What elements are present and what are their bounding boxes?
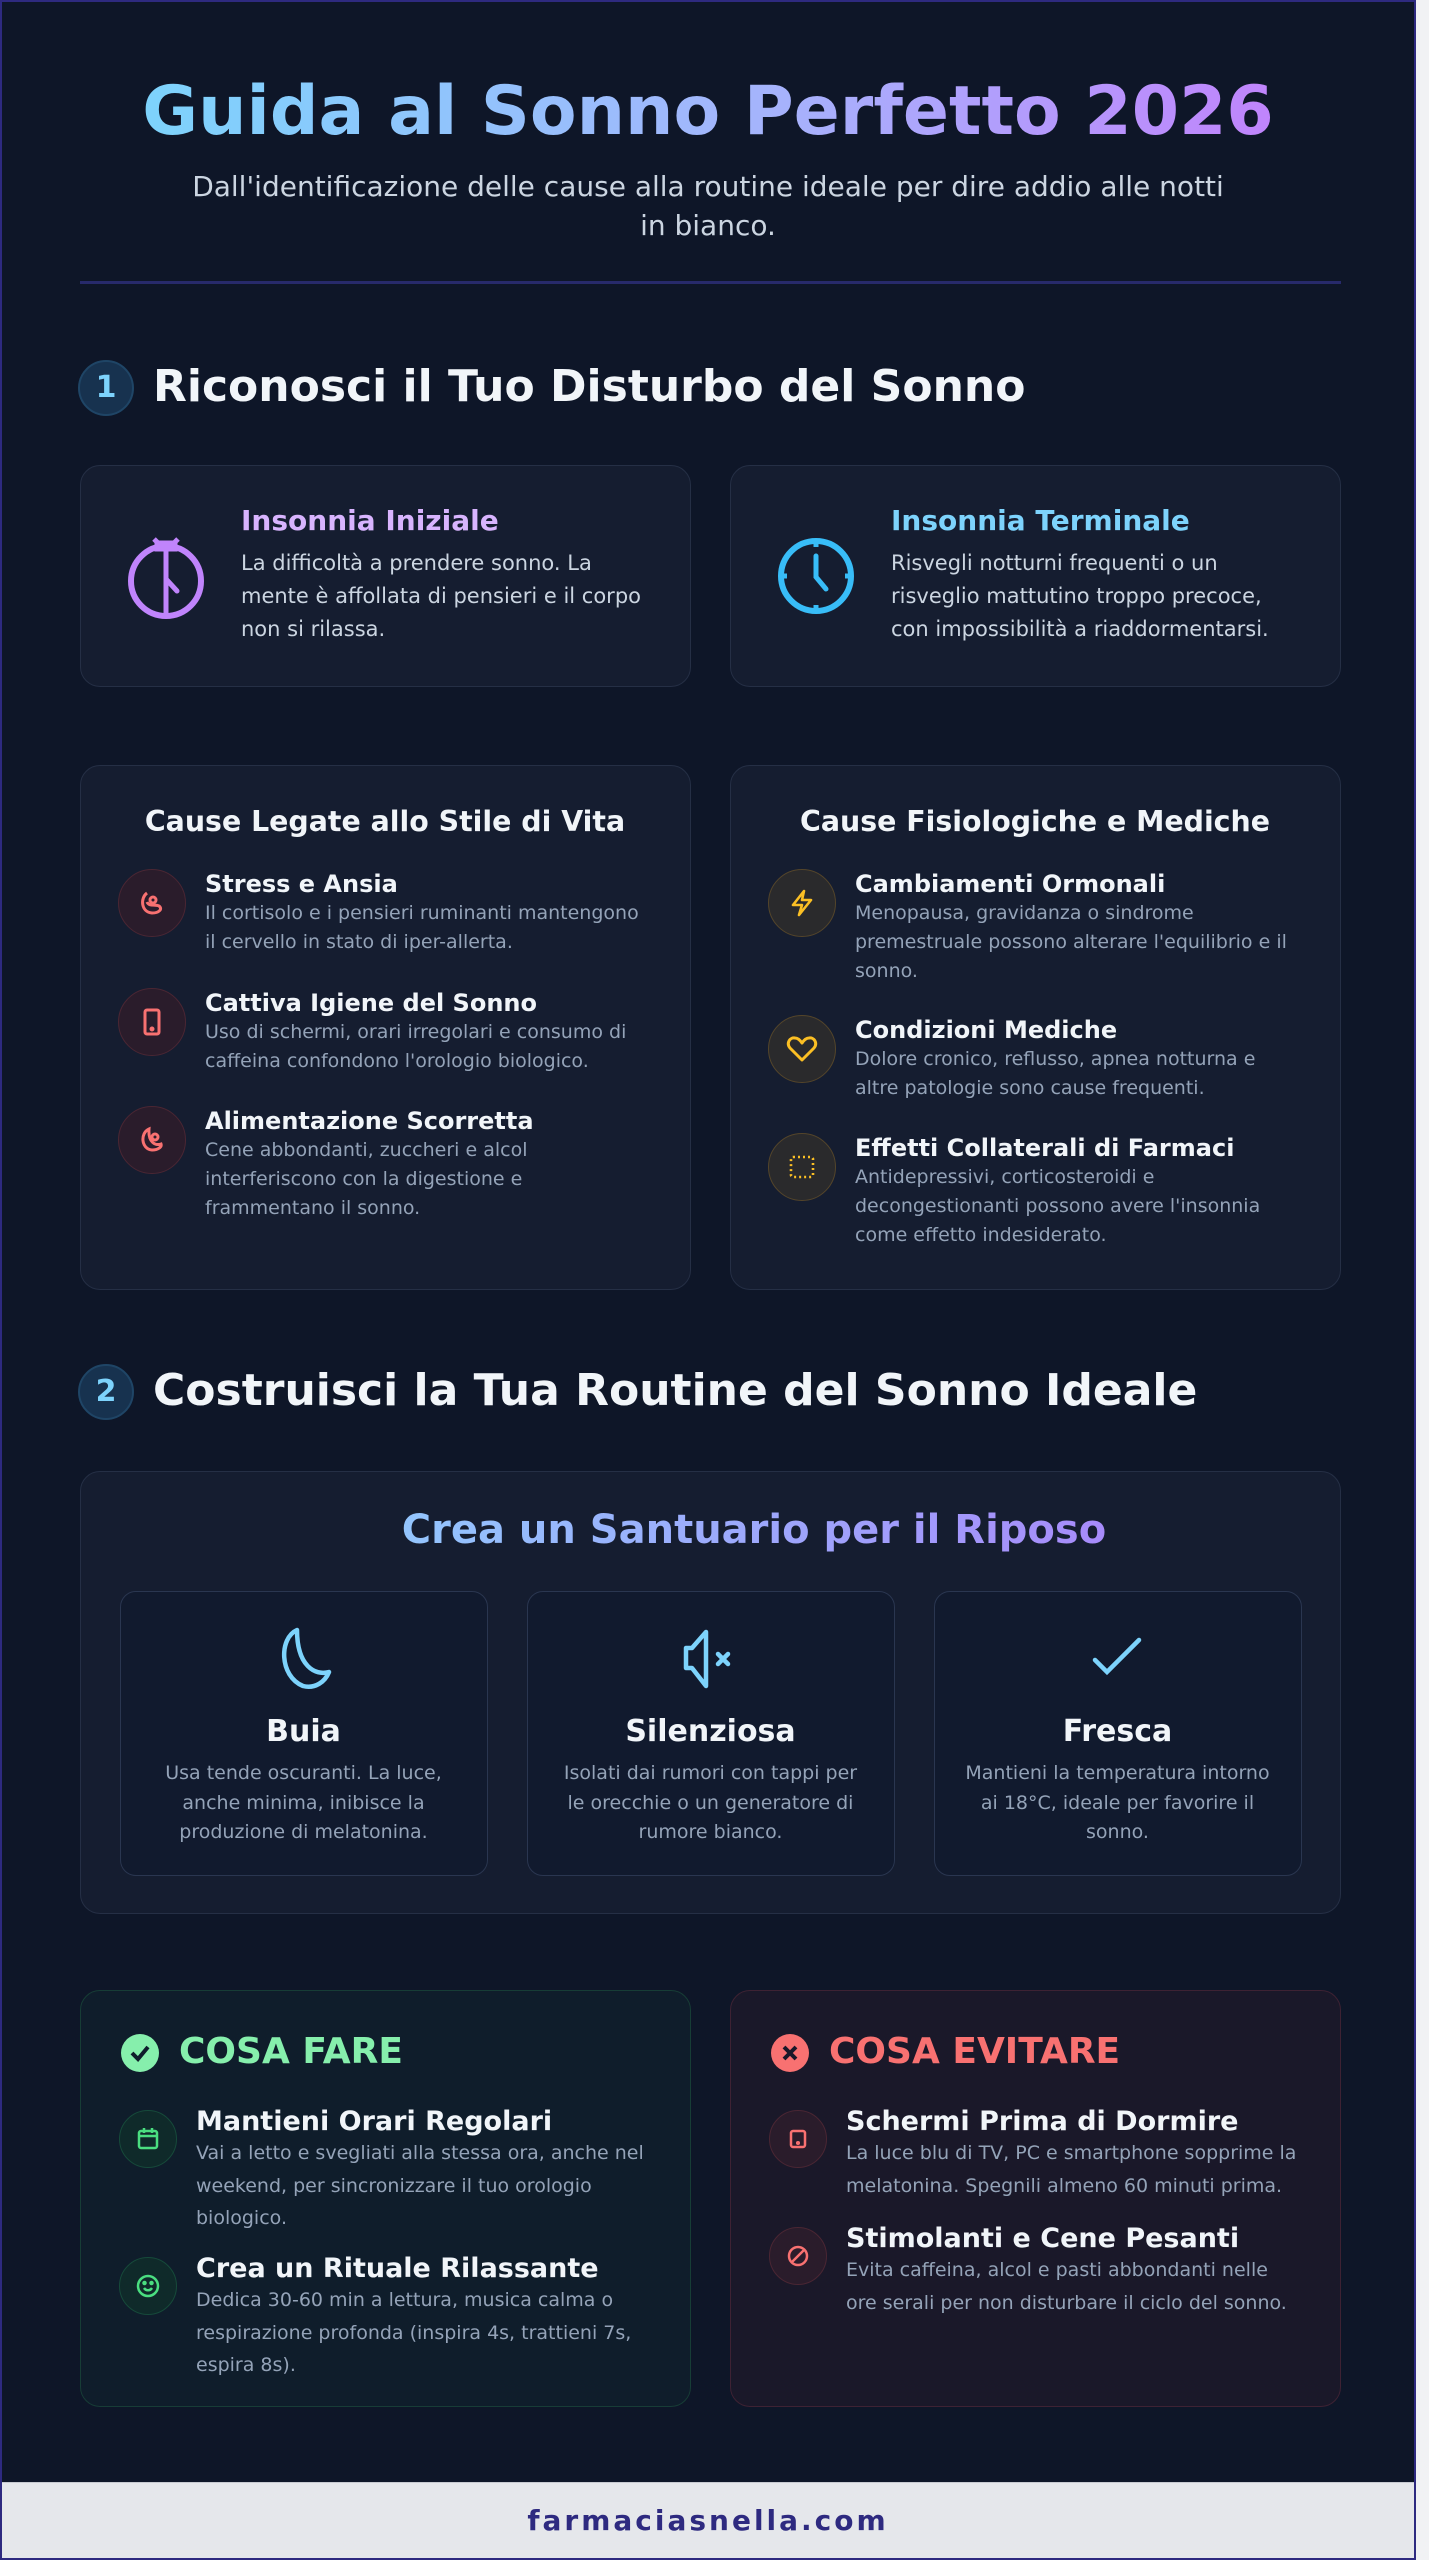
item: side effects: Antidepressivi, corticosteroidi e [855,1166,1154,1188]
item: side effects: decongestionanti possono avere l'insonnia [855,1195,1260,1217]
icon: check [1092,1638,1142,1675]
panel: physiological causes [730,765,1341,1290]
item: sleep hygiene [118,988,626,1072]
heading text: Riconosci il Tuo Disturbo del Sonno [153,361,1025,412]
item: nutrition: interferiscono con la digestione e [205,1168,522,1190]
description: con impossibilità a riaddormentarsi. [891,617,1269,641]
item: orari regolari: weekend, per sincronizzare il tuo orologio [196,2174,592,2196]
panel: cosa fare [80,1990,691,2407]
item: orari regolari: biologico. [196,2207,287,2229]
icon: lightning [768,869,836,937]
icon: x circle [771,2034,809,2072]
card: buia: Usa tende oscuranti. La luce, [165,1762,442,1784]
item: stimolanti: Stimolanti e Cene Pesanti [846,2223,1239,2254]
icon: moon [282,1628,332,1689]
item: orari regolari [119,2106,644,2229]
icon: heart [768,1015,836,1083]
card: silenziosa: Isolati dai rumori con tappi per [564,1762,857,1784]
description [241,551,641,641]
number badge 2 [78,1364,134,1420]
item: nutrition [118,1106,534,1219]
icon: check circle [121,2034,159,2072]
item: hormones: Menopausa, gravidanza o sindrome [855,902,1194,924]
card: buia: Buia [266,1714,341,1749]
icon: food [118,1106,186,1174]
item: medical conditions: Condizioni Mediche [855,1016,1117,1044]
item: nutrition: Alimentazione Scorretta [205,1107,534,1135]
card: buia: produzione di melatonina. [179,1821,428,1843]
number badge 1: 1 [96,370,116,405]
item: stimolanti: Evita caffeina, alcol e pasti abbondanti nelle [846,2259,1268,2281]
panel heading: Cause Legate allo Stile di Vita [145,805,625,838]
icon: mute speaker [684,1630,730,1688]
description: non si rilassa. [241,617,385,641]
item: hormones: Cambiamenti Ormonali [855,870,1165,898]
icon: smile [119,2257,177,2315]
description: risveglio mattutino troppo precoce, [891,584,1262,608]
item: rituale [119,2253,631,2376]
item: rituale: Crea un Rituale Rilassante [196,2253,599,2284]
description: La difficoltà a prendere sonno. La [241,551,592,575]
footer [2,2482,1414,2560]
card: fresca: sonno. [1086,1821,1149,1843]
card: silenziosa: rumore bianco. [639,1821,782,1843]
item: side effects [768,1133,1260,1246]
item: schermi: melatonina. Spegnili almeno 60 minuti prima. [846,2174,1282,2196]
item: sleep hygiene: Uso di schermi, orari irregolari e consumo di [205,1021,626,1043]
number badge 2: 2 [96,1374,116,1409]
title: Insonnia Iniziale [241,504,499,537]
item: stimolanti: ore serali per non disturbare il ciclo del sonno. [846,2292,1287,2314]
item: nutrition: frammentano il sonno. [205,1197,420,1219]
heading text: Costruisci la Tua Routine del Sonno Ideale [153,1365,1197,1416]
item: schermi: Schermi Prima di Dormire [846,2106,1238,2137]
item: hormones: premestruale possono alterare l'equilibrio e il [855,931,1287,953]
title: Guida al Sonno Perfetto 2026 [142,72,1274,151]
subtitle: Dall'identificazione delle cause alla routine ideale per dire addio alle notti [192,170,1224,203]
description: Risvegli notturni frequenti o un [891,551,1218,575]
panel heading: Crea un Santuario per il Riposo [402,1507,1106,1553]
description: mente è affollata di pensieri e il corpo [241,584,641,608]
subtitle [192,170,1224,242]
icon: forbidden [769,2227,827,2285]
panel: insonnia iniziale [80,465,691,687]
card: fresca: ai 18°C, ideale per favorire il [981,1792,1254,1814]
item: rituale: Dedica 30-60 min a lettura, musica calma o [196,2289,613,2311]
item: medical conditions [768,1015,1255,1099]
card: buia [120,1591,488,1876]
item: sleep hygiene: Cattiva Igiene del Sonno [205,989,537,1017]
item: stress: Stress e Ansia [205,870,398,898]
panel: insonnia terminale [730,465,1341,687]
description [891,551,1269,641]
item: rituale: espira 8s). [196,2354,296,2376]
panel: lifestyle causes [80,765,691,1290]
panel: cosa evitare [730,1990,1341,2407]
icon: alarm clock [128,537,204,619]
panel heading: Cause Fisiologiche e Mediche [800,805,1270,838]
card: fresca: Fresca [1063,1714,1172,1749]
item: rituale: respirazione profonda (inspira 4s, trattieni 7s, [196,2322,631,2344]
item: medical conditions: Dolore cronico, reflusso, apnea notturna e [855,1048,1255,1070]
item: side effects: come effetto indesiderato. [855,1224,1107,1246]
item: sleep hygiene: caffeina confondono l'orologio biologico. [205,1050,589,1072]
item: hormones: sonno. [855,960,918,982]
section 2 heading [78,1364,1197,1420]
icon: stress [118,869,186,937]
title: Insonnia Terminale [891,504,1190,537]
item: stress: Il cortisolo e i pensieri ruminanti mantengono [205,902,639,924]
item: side effects: Effetti Collaterali di Farmaci [855,1134,1234,1162]
icon: tablet [769,2110,827,2168]
item: stress: il cervello in stato di iper-allerta. [205,931,513,953]
item: stress [118,869,639,953]
item: stimolanti [769,2223,1287,2314]
card: buia: anche minima, inibisce la [182,1792,425,1814]
heading: COSA EVITARE [829,2031,1120,2072]
item: hormones [768,869,1287,982]
card: fresca [934,1591,1302,1876]
card: silenziosa [527,1591,895,1876]
icon: calendar [119,2110,177,2168]
item: orari regolari: Mantieni Orari Regolari [196,2106,552,2137]
item: schermi: La luce blu di TV, PC e smartphone sopprime la [846,2142,1296,2164]
item: schermi [769,2106,1296,2196]
card: silenziosa: le orecchie o un generatore di [568,1792,853,1814]
item: medical conditions: altre patologie sono cause frequenti. [855,1077,1205,1099]
footer brand text: farmaciasnella.com [527,2504,889,2537]
section 1 heading [78,360,1025,416]
item: nutrition: Cene abbondanti, zuccheri e alcol [205,1139,527,1161]
heading: COSA FARE [179,2031,403,2072]
icon: pill dotted [768,1133,836,1201]
card: silenziosa: Silenziosa [625,1714,796,1749]
subtitle: in bianco. [640,209,776,242]
item: orari regolari: Vai a letto e svegliati alla stessa ora, anche nel [196,2142,644,2164]
card: fresca: Mantieni la temperatura intorno [965,1762,1270,1784]
icon: phone [118,988,186,1056]
panel: sanctuary [80,1471,1341,1914]
icon: clock [778,538,854,614]
number badge 1 [78,360,134,416]
